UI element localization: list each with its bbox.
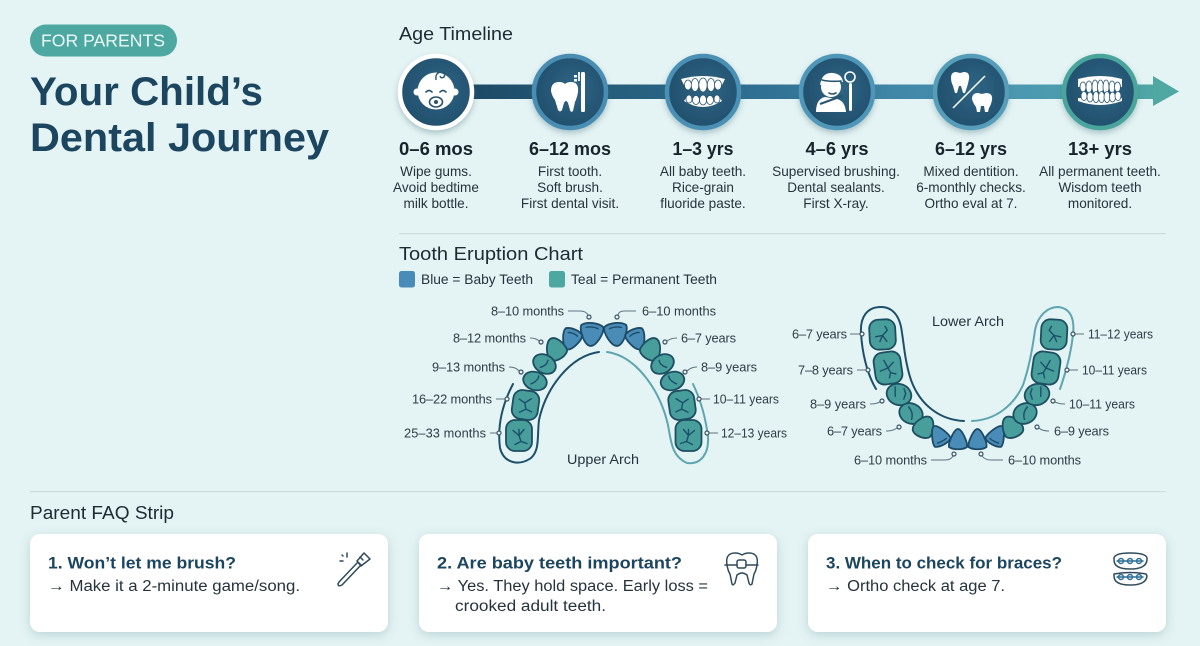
lower arch labels: 6–9 years [1054,424,1109,438]
upper arch labels: 8–12 months [453,330,526,346]
stage: 0-6 mos: Avoid bedtime [393,180,479,195]
chart: upper arch [404,304,787,467]
legend: Blue = Baby Teeth [421,272,533,287]
icon: baby teeth [681,76,725,107]
faq card 3: 3. When to check for braces? [826,554,1062,572]
upper arch labels: 25–33 months [404,426,486,440]
stage: 0-6 mos: Wipe gums. [400,164,472,179]
stage: 4-6 yrs [772,56,900,211]
stage: 13+ yrs: monitored. [1068,196,1132,211]
faq card 1 [30,534,388,632]
stage: 4-6 yrs: 4–6 yrs [806,138,868,159]
lower arch labels: 6–7 years [792,326,847,342]
icon: baby [414,72,458,110]
lower arch labels: 8–9 years [810,396,866,412]
faq card 3: → Ortho check at age 7. [826,578,1005,595]
label: lower arch: Lower Arch [932,314,1004,329]
stage: 6-12 mos [521,56,619,211]
stage: 4-6 yrs: Dental sealants. [787,180,885,195]
upper arch labels: 6–7 years [681,330,736,346]
lower arch labels: 10–11 years [1082,362,1147,378]
panel: age timeline [393,23,1179,211]
stage: 6-12 mos: First dental visit. [521,196,619,211]
stage: 1-3 yrs: 1–3 yrs [672,138,734,159]
legend [399,271,717,288]
stage: 1-3 yrs [660,56,746,211]
label: upper arch: Upper Arch [567,452,639,467]
faq card 2: → Yes. They hold space. Early loss = [437,578,708,595]
stage: 1-3 yrs: All baby teeth. [660,164,746,179]
stage: 0-6 mos: 0–6 mos [399,138,473,159]
stage: 6-12 mos: First tooth. [538,164,602,179]
badge: for parents [30,24,177,56]
stage: 1-3 yrs: fluoride paste. [660,196,746,211]
lower arch labels: 11–12 years [1088,326,1153,342]
lower teeth [869,319,1068,449]
stage: 13+ yrs: Wisdom teeth [1058,180,1142,195]
lower arch labels: 6–7 years [827,424,882,438]
faq card 3 [808,534,1166,632]
stage: 6-12 yrs: 6-monthly checks. [916,180,1026,195]
stage: 6-12 mos: 6–12 mos [529,138,611,159]
upper arch labels: 8–9 years [701,360,757,374]
upper arch labels: 9–13 months [432,360,505,374]
arch lines [499,352,708,463]
legend: Teal = Permanent Teeth [571,272,717,287]
upper arch labels: 16–22 months [412,392,492,406]
faq card 2: 2. Are baby teeth important? [437,554,682,572]
lower arch labels: 6–10 months [854,452,927,468]
stage: 4-6 yrs: First X-ray. [803,196,869,211]
heading: tooth eruption chart: Tooth Eruption Chart [399,243,583,264]
icon: braces on teeth [1114,553,1147,585]
upper arch labels: 8–10 months [491,304,564,318]
stage: 13+ yrs: 13+ yrs [1068,138,1132,159]
badge: for parents: FOR PARENTS [41,30,165,50]
stage: 6-12 yrs: Mixed dentition. [923,164,1019,179]
stage: 4-6 yrs: Supervised brushing. [772,164,900,179]
upper arch labels: 6–10 months [642,304,716,318]
chart: lower arch [792,307,1153,468]
stage: 6-12 yrs: Ortho eval at 7. [925,196,1017,211]
icon: toothbrush [338,553,370,586]
stage: 6-12 mos: Soft brush. [537,180,603,195]
upper arch labels: 10–11 years [713,392,779,406]
stage: 0-6 mos [393,56,479,211]
icon: permanent teeth [1078,76,1122,105]
faq card 2 [419,534,777,632]
arch lines [861,307,1073,421]
stage: 6-12 yrs [916,56,1026,211]
panel: tooth eruption chart [399,243,1153,468]
heading: parent faq strip: Parent FAQ Strip [30,502,174,523]
upper arch labels [404,304,787,440]
lower arch labels: 6–10 months [1008,452,1081,468]
stage: 6-12 yrs: 6–12 yrs [935,138,1007,159]
title [30,70,330,160]
icon: tooth with braces [725,553,758,585]
lower arch labels: 7–8 years [798,362,853,378]
title: Your Child’s [30,70,263,114]
faq card 2: crooked adult teeth. [455,598,606,615]
icon: child with mirror [816,72,855,112]
heading: age timeline: Age Timeline [399,23,513,44]
icon: mixed dentition [951,72,992,112]
stage: 13+ yrs [1039,56,1161,211]
panel: parent faq strip [30,502,1166,632]
timeline arrow [465,76,1179,106]
stage: 0-6 mos: milk bottle. [404,196,468,211]
lower arch labels [792,326,1153,468]
lower arch labels: 10–11 years [1069,396,1135,412]
upper arch labels: 12–13 years [721,426,787,440]
title: Dental Journey [30,116,330,160]
faq card 1: → Make it a 2-minute game/song. [48,578,300,595]
faq card 1: 1. Won’t let me brush? [48,554,236,572]
upper teeth [506,322,702,451]
icon: tooth and brush [551,72,585,112]
stage: 1-3 yrs: Rice-grain [672,180,734,195]
stage: 13+ yrs: All permanent teeth. [1039,164,1161,179]
